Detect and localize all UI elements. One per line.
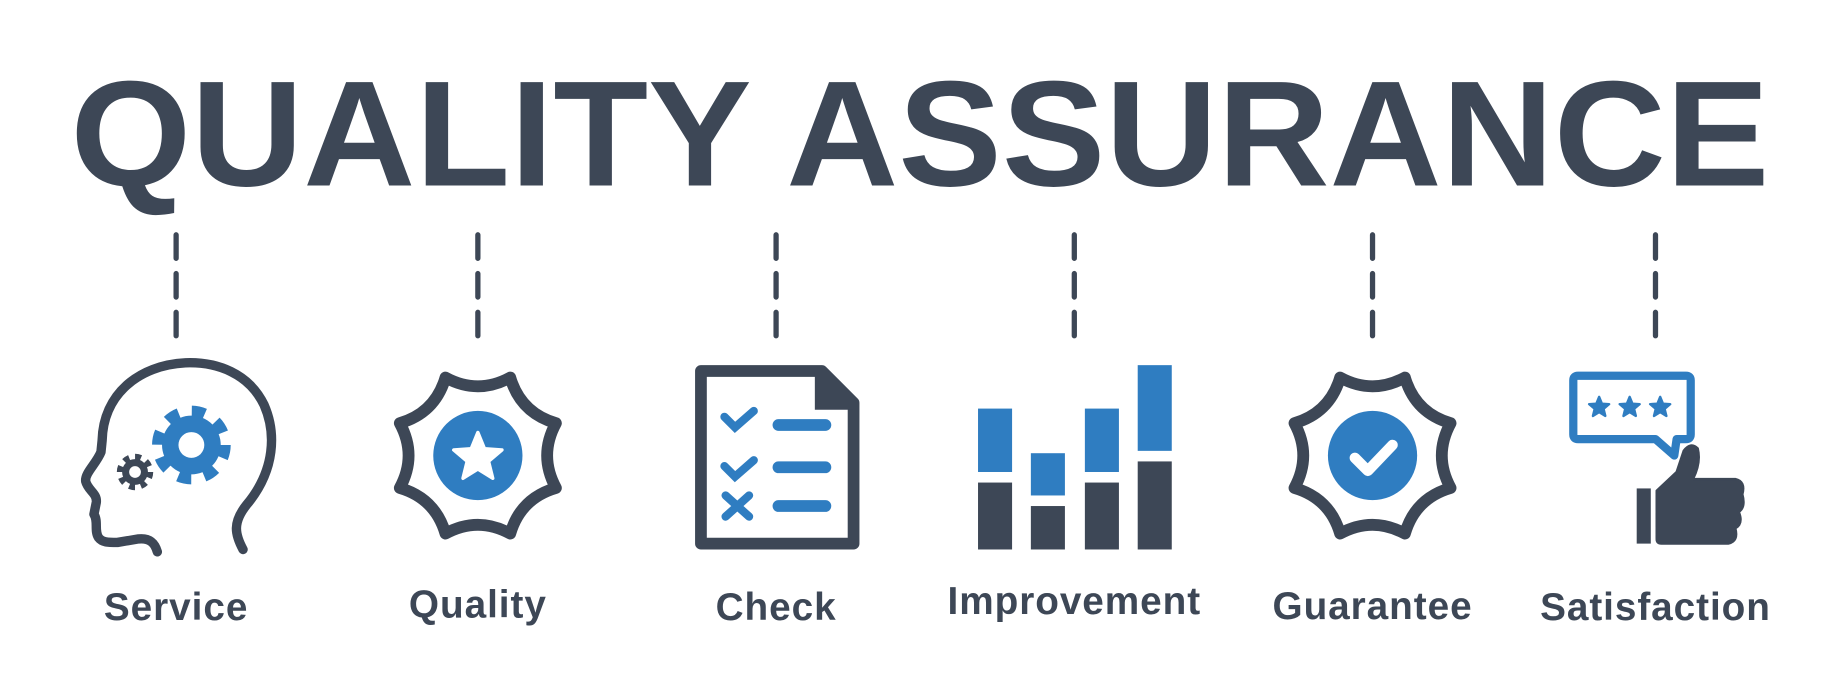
- icon: service head with gears: [86, 363, 272, 552]
- title: QUALITY ASSURANCE: [70, 50, 1769, 218]
- label: Service: Service: [104, 586, 248, 629]
- label: Guarantee: Guarantee: [1273, 585, 1473, 628]
- label: Check: Check: [716, 586, 837, 629]
- icon: satisfaction bubble and thumbs up: [1573, 376, 1744, 544]
- label: Quality: Quality: [409, 584, 547, 627]
- labels: [104, 580, 1771, 629]
- icon: guarantee badge with check: [1294, 377, 1451, 534]
- icon: quality badge with star: [400, 377, 556, 534]
- label: Improvement: Improvement: [948, 580, 1201, 623]
- icon: improvement bar chart: [978, 365, 1172, 549]
- dashed connectors: [176, 235, 1655, 336]
- icon: check document: [701, 371, 854, 544]
- label: Satisfaction: Satisfaction: [1540, 586, 1771, 629]
